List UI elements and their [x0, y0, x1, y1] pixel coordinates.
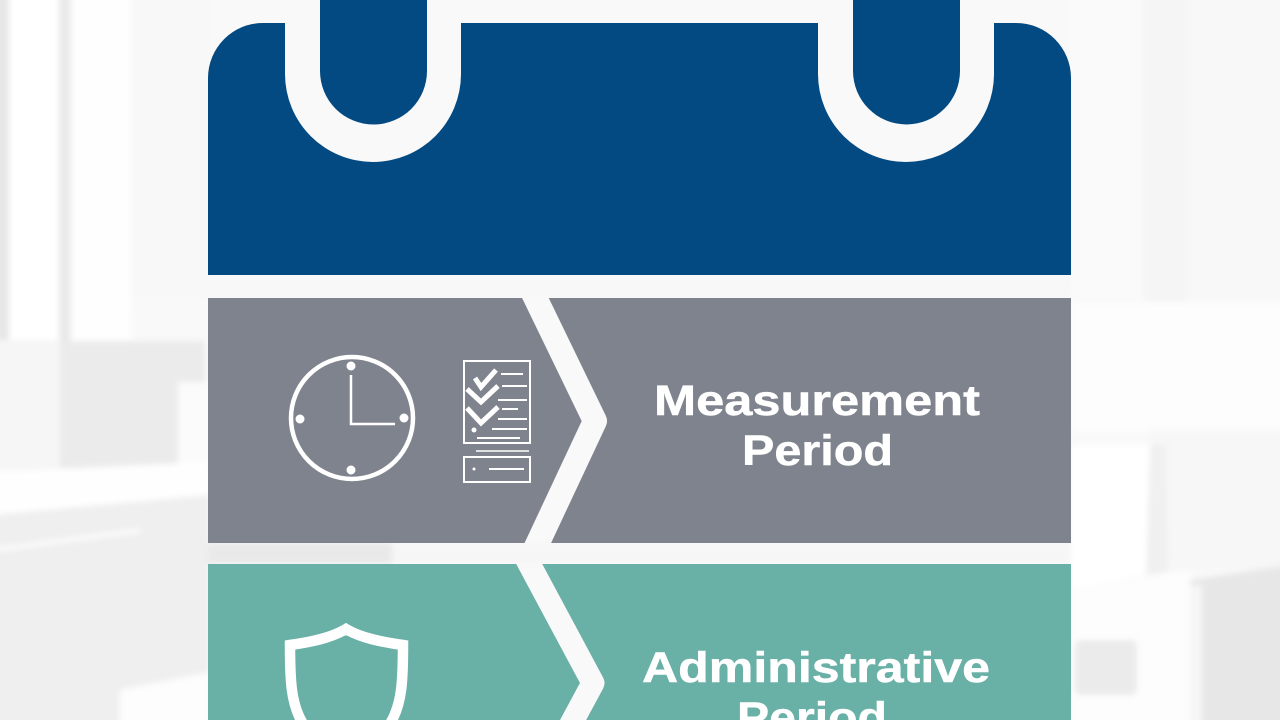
icon: checklist: [464, 361, 530, 482]
calendar ring right: [853, 0, 960, 124]
heading: measurement period: Measurement: [654, 377, 980, 425]
panel: calendar header: [208, 0, 1071, 275]
panel: administrative period: [208, 564, 1071, 720]
icon: shield: [290, 629, 403, 720]
icon: clock: [291, 357, 413, 479]
calendar ring left: [320, 0, 427, 124]
heading: measurement period: Period: [742, 427, 893, 475]
heading: administrative period: Administrative: [642, 644, 990, 692]
heading: measurement period: [654, 377, 980, 475]
panel: measurement period: [208, 298, 1071, 543]
heading: administrative period: [642, 644, 990, 720]
